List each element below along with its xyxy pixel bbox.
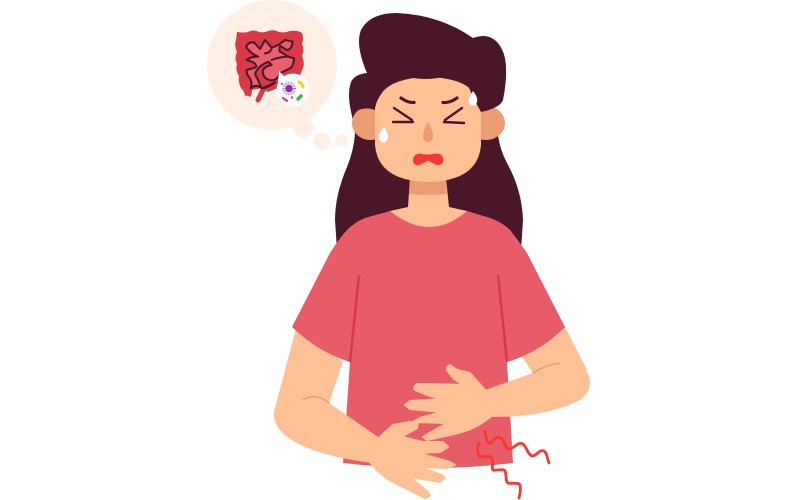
face	[375, 77, 481, 182]
right upper arm	[510, 327, 587, 385]
re-drawn sleeve edge	[507, 300, 565, 362]
right forearm	[485, 327, 590, 417]
nose	[423, 122, 433, 142]
back hair	[335, 60, 523, 250]
sleeve fold lines	[350, 275, 507, 362]
icon: intestine	[235, 30, 304, 100]
left hand	[370, 422, 455, 498]
right hand	[405, 365, 490, 440]
shirt	[292, 211, 565, 468]
icon: bacteria circle	[276, 71, 310, 106]
neck	[390, 178, 467, 227]
eyebrows and squeezed eyes	[393, 98, 464, 123]
sweat drops	[379, 91, 477, 143]
ears	[352, 106, 505, 140]
mouth	[413, 154, 444, 165]
thought bubble	[207, 0, 347, 150]
left forearm	[274, 385, 378, 463]
arm creases	[303, 363, 560, 403]
front hair	[350, 13, 506, 112]
left upper arm	[274, 325, 343, 420]
pain squiggles	[478, 431, 549, 498]
